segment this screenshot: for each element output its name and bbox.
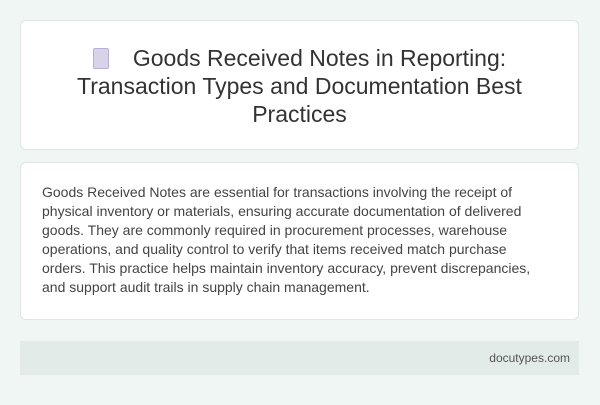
title: Goods Received Notes in Reporting: Transaction Types and Documentation Best Practices	[77, 45, 522, 127]
icon: receipt	[93, 48, 109, 69]
footer text: docutypes.com	[489, 351, 570, 365]
panel: title	[20, 20, 579, 150]
footer	[20, 341, 579, 375]
text block: Goods Received Notes are essential for transactions involving the receipt of physical inventory or materials, ensuring accurate documentation of delivered goods. They are commonly required in procurement processes, warehouse operations, and quality control to verify that items received match purchase orders. This practice helps maintain inventory accuracy, prevent discrepancies, and support audit trails in supply chain management.	[42, 184, 530, 295]
panel: description	[20, 162, 579, 320]
